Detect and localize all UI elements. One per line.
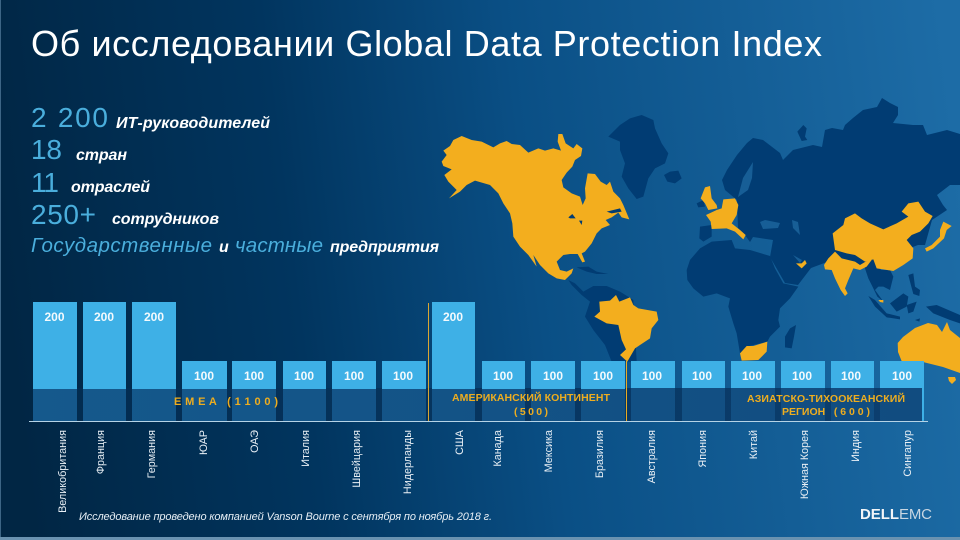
- bar values: 100: [642, 369, 662, 383]
- country labels: Германия: [146, 430, 158, 478]
- bar values: 100: [493, 369, 513, 383]
- stat: industries: 11: [31, 167, 59, 198]
- bar values: 100: [194, 369, 214, 383]
- footnote: Исследование проведено компанией Vanson Bourne с сентября по ноябрь 2018 г.: [79, 511, 492, 523]
- country labels: Австралия: [646, 430, 658, 483]
- stat: countries: 18: [31, 134, 62, 165]
- region: EMEA: E M E A ( 1 1 0 0 ): [174, 396, 278, 408]
- country labels: ОАЭ: [249, 430, 261, 453]
- stat: employees: сотрудников: [112, 211, 219, 228]
- logo: Dell EMC: DELL: [860, 506, 899, 523]
- map: surveyed countries: [442, 134, 960, 384]
- region: Asia-Pacific: РЕГИОН ( 6 0 0 ): [782, 406, 870, 418]
- bar values: 200: [44, 310, 65, 324]
- bar chart: respondents by country: [29, 302, 928, 513]
- key stats: [31, 102, 440, 257]
- stat: industries: [31, 167, 150, 198]
- country: USA and Canada and Mexico: [442, 134, 629, 280]
- stat: employees: [31, 199, 219, 230]
- bar values: 100: [593, 369, 613, 383]
- stat: public and private enterprises: частные: [235, 234, 323, 257]
- bars: upper sections: [33, 302, 924, 421]
- axis and region dividers: [29, 303, 928, 422]
- country labels: Южная Корея: [799, 430, 811, 499]
- country: China: [833, 202, 933, 271]
- stat: public and private enterprises: и: [219, 239, 229, 256]
- country: Singapore: [878, 300, 883, 303]
- country: France, Germany, Switzerland, Netherlands, Italy: [706, 198, 746, 239]
- country labels: Канада: [492, 430, 504, 467]
- map: non-surveyed land: [568, 98, 960, 362]
- region: Asia-Pacific: АЗИАТСКО-ТИХООКЕАНСКИЙ: [747, 392, 905, 405]
- country labels: Индия: [850, 430, 862, 462]
- stat: public and private enterprises: [31, 234, 440, 257]
- bar values: 200: [443, 310, 463, 324]
- country: India: [824, 252, 872, 296]
- logo: Dell EMC: EMC: [899, 506, 932, 523]
- logo: Dell EMC: [860, 506, 932, 523]
- country labels: Мексика: [543, 430, 555, 472]
- stat: employees: 250+: [31, 199, 96, 230]
- world map: [442, 98, 960, 384]
- country labels: [57, 429, 914, 513]
- bar values: 100: [344, 369, 364, 383]
- bar values: 100: [742, 369, 762, 383]
- stat: public and private enterprises: Государственные: [31, 234, 212, 257]
- country labels: Италия: [300, 430, 312, 467]
- map: lakes: [568, 208, 855, 260]
- country labels: Швейцария: [351, 430, 363, 488]
- bar values: 100: [244, 369, 264, 383]
- country: Japan: [925, 222, 952, 252]
- country labels: ЮАР: [198, 430, 210, 455]
- bar values: 100: [841, 369, 861, 383]
- map: inland seas: [738, 162, 802, 263]
- bar values: 100: [294, 369, 314, 383]
- stat: industries: отраслей: [71, 179, 150, 196]
- country labels: Китай: [748, 430, 760, 459]
- bar values: 100: [692, 369, 712, 383]
- country: UK: [701, 186, 717, 210]
- country: UAE: [796, 260, 807, 268]
- bars: lower sections: [33, 388, 922, 421]
- region labels: [174, 391, 905, 418]
- country labels: Сингапур: [902, 430, 914, 477]
- stat: IT leaders: ИТ-руководителей: [116, 115, 270, 132]
- country: Australia: [898, 322, 960, 373]
- band behind lower bar sections: [33, 388, 923, 421]
- region: Americas: [452, 391, 611, 418]
- bar values: 100: [543, 369, 563, 383]
- bar values: [44, 310, 912, 383]
- country labels: Япония: [697, 430, 709, 468]
- stat: IT leaders: [31, 102, 270, 133]
- country labels: Нидерланды: [402, 430, 414, 494]
- stat: countries: стран: [76, 147, 127, 164]
- country labels: Бразилия: [594, 430, 606, 478]
- region: Asia-Pacific: [747, 392, 905, 418]
- country labels: Великобритания: [57, 430, 69, 513]
- stat: countries: [31, 134, 127, 165]
- stat: IT leaders: 2 200: [31, 102, 108, 133]
- country labels: Франция: [95, 430, 107, 474]
- region: Americas: ( 5 0 0 ): [514, 406, 548, 418]
- region: Americas: АМЕРИКАНСКИЙ КОНТИНЕНТ: [452, 391, 611, 404]
- title: Об исследовании Global Data Protection Index: [31, 23, 822, 64]
- bar values: 100: [892, 369, 912, 383]
- country: Brazil: [594, 295, 658, 362]
- country: South Africa: [740, 342, 767, 361]
- bar values: 200: [94, 310, 114, 324]
- stat: public and private enterprises: предприятия: [330, 239, 440, 256]
- bar values: 100: [792, 369, 812, 383]
- bar values: 200: [144, 310, 164, 324]
- bar values: 100: [393, 369, 413, 383]
- country labels: США: [454, 429, 466, 455]
